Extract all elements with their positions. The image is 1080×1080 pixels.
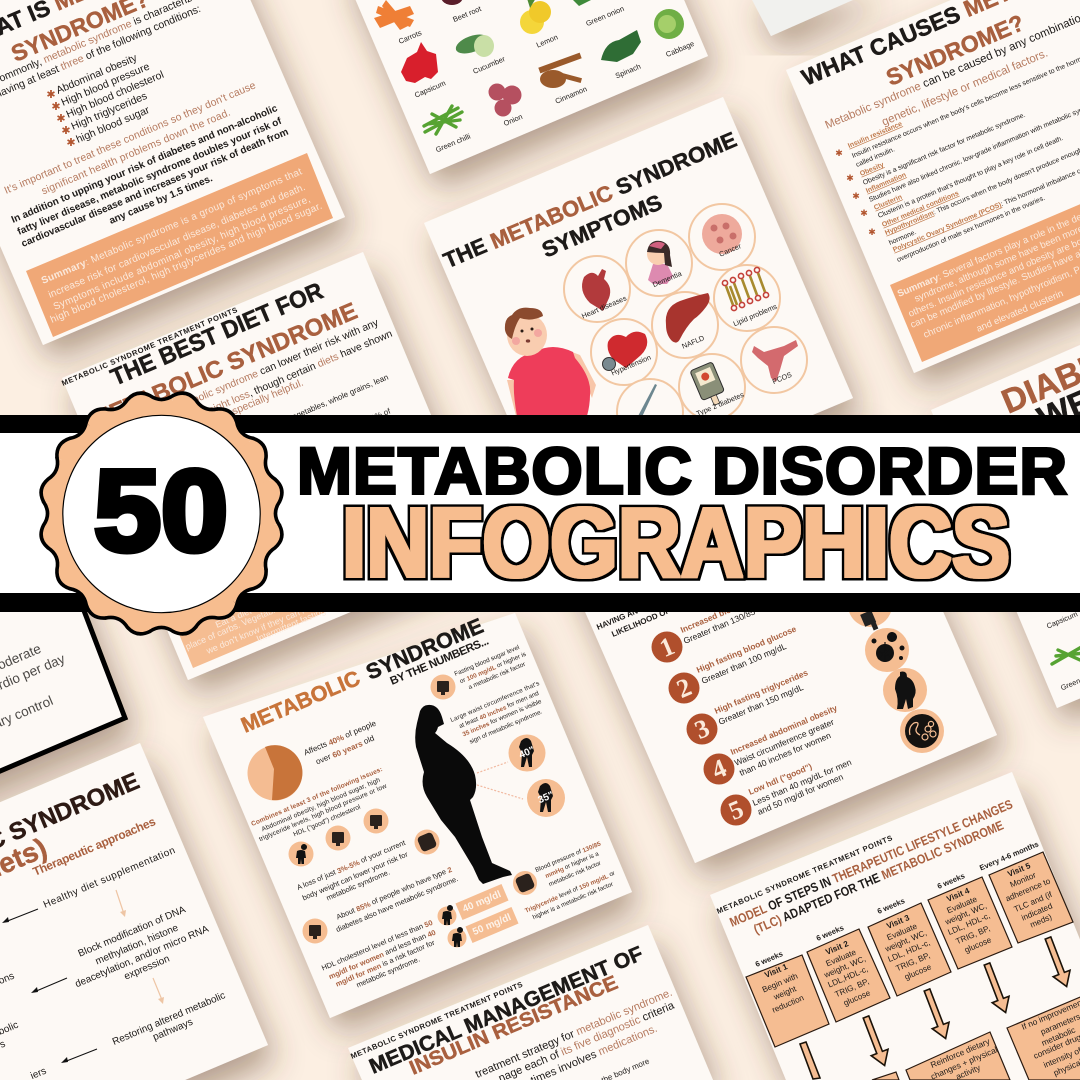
hdl value boxes	[455, 884, 519, 943]
condition bullet list: ✱	[56, 113, 66, 125]
panel: diabetes card top right	[931, 319, 1080, 575]
stat: right side texts: Blood pressure of 130/85	[534, 840, 602, 874]
panel: grey image card at top right	[748, 0, 880, 36]
left column fragments	[0, 971, 48, 1080]
label and chilli	[1045, 609, 1080, 692]
risk icons column	[848, 583, 944, 753]
summary text: Summary: Metabolic syndrome is a group of symptoms that	[40, 166, 304, 287]
symptom labels: Lipid problems	[732, 302, 779, 328]
panel: what causes metabolic syndrome	[786, 0, 1080, 373]
criteria values: Greater than 130/85	[682, 606, 757, 646]
arrows	[2, 890, 164, 1063]
numbers: 5	[724, 794, 748, 826]
intro text: Metabolic syndrome can lower their risk with any	[170, 317, 381, 415]
criteria values: Less than 40 mg/dL for men	[751, 757, 853, 808]
stat: right side texts: at least 40 inches for men and	[458, 690, 540, 730]
pie chart	[248, 745, 302, 800]
icon: hypertension heart	[602, 332, 647, 370]
banner bottom bar	[0, 593, 1080, 612]
stat: weight loss and diabetes: HDL cholesterol level of less than 50	[320, 917, 434, 973]
intro text: to be especially helpful.	[201, 378, 305, 430]
waist icons: 35"	[537, 790, 556, 806]
card background	[0, 743, 268, 1080]
heading: SYNDROME?	[882, 9, 1028, 91]
causes list	[835, 52, 1080, 264]
food labels: Green onion	[585, 4, 625, 28]
heading	[237, 613, 491, 738]
food labels: Green chilli	[434, 131, 472, 154]
stat: combines: HDL ("good") cholesterol	[292, 803, 362, 838]
symptom labels: Hypertension	[610, 353, 652, 377]
eyebrow: METABOLIC SYNDROME TREATMENT POINTS	[60, 305, 239, 388]
visit 4 text: weight, WC,	[943, 901, 988, 927]
causes list: hormone.	[888, 229, 918, 247]
criteria titles: Increased abdominal obesity	[729, 703, 839, 757]
icon: lipid bilayer	[722, 267, 769, 311]
food labels: Cinnamon	[554, 84, 588, 106]
visit 5 text	[1004, 861, 1054, 930]
card background	[348, 925, 713, 1080]
intro text: genetic, lifestyle or medical factors.	[880, 48, 1050, 128]
heading: THE METABOLIC SYNDROME	[440, 127, 740, 273]
visit 3 text	[883, 913, 933, 982]
bold risk text: In addition to upping your risk of diabetes and non-alcoholic	[10, 103, 280, 226]
white disc	[63, 415, 260, 613]
heading: (TLC) ADAPTED FOR THE METABOLIC SYNDROME	[751, 817, 1006, 937]
visit 5 text: Visit 5	[1006, 861, 1032, 879]
visit 1 text: Begin with	[761, 971, 800, 995]
criteria values: and 50 mg/dl for women	[756, 772, 845, 817]
summary box	[165, 560, 340, 668]
condition bullet list: high blood sugar	[74, 104, 152, 146]
card background	[62, 252, 489, 680]
condition bullet list: High triglycerides	[69, 90, 149, 133]
card background	[0, 430, 125, 803]
banner	[0, 415, 1080, 612]
diet notes: Eat lots of vegetables, whole grains, lean	[252, 373, 390, 438]
stat: combines: Abdominal obesity, high blood sugar, high	[261, 777, 382, 833]
causes list: ✱	[835, 148, 843, 158]
diet notes: Limit carbs to about 40-50% of	[288, 406, 392, 457]
visit 5 text: meds)	[1029, 912, 1053, 930]
card background	[424, 97, 853, 524]
label and chilli: Capsicum	[1045, 609, 1079, 631]
numbers: 2	[672, 672, 696, 704]
symptom labels: Heart diseases	[580, 293, 628, 321]
food labels: Cabbage	[664, 39, 696, 59]
card background	[786, 0, 1080, 373]
numbers	[655, 631, 748, 826]
steps: Restoring altered metabolic	[111, 990, 227, 1048]
criteria titles: Low hdl ("good")	[747, 761, 814, 797]
stat: right side texts	[449, 644, 616, 921]
visit 4 text: TRIG, BP,	[955, 924, 991, 946]
visit 2 text: Evaluate	[825, 947, 858, 968]
visit 2 text: LDL,HDL-c,	[827, 964, 869, 990]
stat: weight loss and diabetes: diabetes also have metabolic syndrome.	[335, 874, 459, 934]
steps: deacetylation, and/or micro RNA	[74, 924, 211, 990]
icon: syringe	[637, 384, 657, 419]
stat: right side texts: Fasting blood sugar level	[453, 644, 521, 678]
action text: Reinforce dietary	[929, 1036, 992, 1070]
food labels: Capsicum	[413, 78, 447, 100]
heading: INSULIN RESISTANCE	[406, 972, 621, 1080]
stat: weight loss and diabetes	[295, 838, 459, 989]
stat: right side texts: higher is a metabolic risk factor	[532, 881, 614, 921]
card background	[555, 415, 997, 863]
icon: cancer cells	[702, 214, 742, 254]
bold risk text: any cause by 1.5 times.	[108, 173, 215, 227]
icon: liver	[666, 293, 710, 343]
stat: right side texts: mmHg or higher is a	[544, 850, 600, 880]
panel: syndrome diets	[0, 743, 268, 1080]
visit 2 text: glucose	[842, 988, 872, 1008]
summary text: increase risk for cardiovascular disease, diabetes and death.	[47, 182, 307, 301]
condition bullet list: High blood pressure	[59, 61, 152, 109]
causes list: Inflammation	[865, 172, 907, 195]
visit 3 text: TRIG, BP,	[895, 951, 931, 973]
summary text: place of carbs. Vegetables and fruits are healthy	[184, 567, 365, 652]
action text: metabolic	[1040, 1025, 1077, 1048]
visit 2 text: Visit 2	[824, 939, 850, 957]
hdl value boxes: 50 mg/dl	[471, 912, 513, 938]
heading: SYMPTOMS	[538, 189, 666, 263]
treatment note: significant health problems down the road.	[40, 107, 232, 197]
criteria values: than 40 inches for women	[738, 730, 833, 778]
stat: 40 percent: Affects 40% of people	[302, 718, 378, 757]
icon circles left	[288, 674, 537, 948]
causes list: Obesity is a significant risk factor for metabolic syndrome.	[862, 112, 1027, 187]
visit 1 text	[761, 962, 806, 1015]
food labels: Carrots	[397, 28, 423, 46]
card background	[710, 772, 1080, 1080]
dotted connectors	[477, 762, 523, 799]
interval labels	[754, 839, 1040, 969]
steps: methylation, histone	[94, 922, 180, 967]
steps: Healthy diet supplementation	[42, 845, 177, 911]
title line one: METABOLIC DISORDER	[297, 434, 1067, 508]
stat: right side texts: 35 inches for women is visible	[461, 698, 543, 738]
stat: weight loss and diabetes: A loss of just 3%-5% of your current	[295, 838, 407, 892]
number badges	[652, 632, 752, 826]
causes list: overproduction of male sex hormones in the ovaries.	[896, 195, 1046, 264]
condition bullet list: ✱	[46, 89, 56, 101]
card background	[0, 0, 345, 345]
icon: heart	[582, 269, 610, 311]
symptom labels: Type 2 diabetes	[695, 390, 745, 418]
visit 5 text: TLC and (if	[1013, 890, 1054, 914]
heading: THE BEST DIET FOR	[107, 278, 327, 392]
visit 5 text: indicated	[1020, 901, 1054, 923]
summary text: Symptoms include abdominal obesity, high blood pressure,	[52, 194, 312, 313]
panel: best diet	[60, 252, 489, 680]
criteria titles: Increased blood pressure	[679, 586, 777, 635]
visit 3 text: LDL, HDL-c,	[887, 938, 931, 964]
panel: medical management	[348, 925, 713, 1080]
causes list: Clusterin is a protein that's thought to play a key role in cell death.	[877, 135, 1064, 220]
down arrows	[800, 935, 1075, 1079]
number 50: 50	[94, 448, 228, 576]
panel: symptoms	[424, 97, 853, 524]
criteria values: Greater than 100 mg/dL	[700, 641, 788, 686]
symptom labels: NAFLD	[680, 333, 706, 351]
heading: METABOLIC SYNDROME	[87, 298, 361, 434]
interval labels: 6 weeks	[936, 871, 966, 891]
visit 2 text: weight, WC,	[822, 954, 867, 980]
visit 3 text: weight, WC,	[883, 928, 928, 954]
eyebrow: METABOLIC SYNDROME TREATMENT POINTS	[349, 980, 524, 1061]
column title: Therapeutic approaches	[31, 814, 158, 879]
panel: foods grid	[342, 0, 708, 174]
intro: LIKELIHOOD OF METABOLIC SYNDROME	[610, 568, 762, 639]
panel: what is metabolic syndrome	[0, 0, 345, 345]
panel: right veg card under banner	[995, 500, 1080, 708]
criteria values	[682, 606, 853, 817]
waist icons	[508, 734, 565, 817]
visit 1 text: weight	[771, 984, 798, 1002]
causes list: ✱	[860, 208, 868, 218]
stat: weight loss and diabetes: mg/dl for men is a risk factor for	[334, 938, 437, 988]
stat: right side texts: Triglyceride level of 150 mg/dL or	[524, 870, 616, 914]
food labels: Spinach	[614, 62, 642, 80]
condition bullet list: Abdominal obesity	[54, 52, 140, 97]
bold risk text: cardiovascular disease and increases your risk of death from	[20, 127, 290, 250]
causes list: ✱	[868, 227, 876, 237]
card background	[342, 0, 708, 174]
causes list: called insulin.	[855, 146, 896, 169]
card background	[203, 613, 632, 1018]
stat: combines: triglyceride levels, high blood pressure or low	[258, 783, 388, 843]
heading: MODEL OF STEPS IN THERAPEUTIC LIFESTYLE CHANGES	[727, 796, 1015, 930]
criteria values: Waist circumference greater	[733, 717, 836, 768]
interval labels: 6 weeks	[754, 949, 784, 969]
interval labels: 6 weeks	[876, 896, 906, 916]
heading: METABOLIC	[237, 665, 364, 738]
intro: HAVING ANY 3 OF THESE INCREASES YOUR	[595, 556, 757, 632]
criteria values: Greater than 150 mg/dL	[717, 682, 805, 727]
lower action boxes	[872, 995, 1080, 1080]
causes list: ✱	[852, 191, 860, 201]
card background	[931, 345, 1080, 575]
action text	[929, 993, 1080, 1080]
food labels: Onion	[502, 112, 524, 128]
icon: dementia girl	[647, 241, 673, 284]
food labels	[397, 4, 696, 154]
intro text: weight loss, though certain diets have shown	[199, 329, 394, 420]
interval labels: 6 weeks	[815, 923, 845, 943]
stat: 40 percent: over 60 years old	[314, 734, 376, 766]
symptom labels: Dementia	[651, 269, 683, 289]
heading: BY THE NUMBERS...	[388, 635, 491, 688]
summary text: and elevated clusterin	[975, 288, 1065, 335]
heading: SYNDROME	[362, 613, 487, 685]
panel: black border exercise card	[0, 430, 125, 803]
visit 3 text: Evaluate	[886, 921, 919, 942]
condition bullet list: ✱	[66, 137, 76, 149]
hdl value boxes: 40 mg/dl	[461, 889, 503, 915]
criteria titles: High fasting blood glucose	[695, 624, 798, 675]
visit 3 text: Visit 3	[885, 913, 911, 931]
causes list: Clusterin	[873, 194, 903, 212]
summary box	[890, 183, 1080, 362]
visit 4 text: Evaluate	[946, 894, 979, 915]
numbers: 4	[707, 753, 731, 785]
bold risk text: fatty liver disease, metabolic syndrome doubles your risk of	[16, 116, 284, 238]
visit 5 text: adherence to	[1004, 876, 1052, 903]
steps: pathways	[151, 1017, 195, 1043]
stat: right side texts: a metabolic risk factor	[467, 661, 527, 691]
stat: weight loss and diabetes: About 85% of people who have type 2	[335, 865, 453, 921]
food icons	[374, 0, 684, 134]
criteria titles	[679, 586, 839, 797]
visit 2 text	[822, 939, 872, 1008]
numbers: 1	[655, 631, 679, 663]
causes list: ✱	[846, 173, 854, 183]
stat: weight loss and diabetes: mg/dl for women and less than 40	[327, 927, 437, 981]
interval labels: Every 4-6 months	[978, 839, 1040, 873]
badge: 50	[0, 351, 324, 676]
silhouette of man	[415, 705, 512, 884]
stat: weight loss and diabetes: body weight can lower your risk for	[301, 849, 410, 902]
banner white band	[0, 433, 1080, 593]
symptom labels: Cancer	[718, 241, 743, 259]
visit 4 text	[943, 886, 993, 955]
causes list: Insulin resistance	[847, 121, 904, 150]
criteria titles: High fasting triglycerides	[713, 667, 810, 716]
steps	[42, 845, 227, 1048]
symptom labels: PCOS	[771, 370, 793, 386]
stat: right side texts: or 100 mg/dL or higher is	[459, 651, 527, 685]
stat: right side texts: sign of metabolic syndrome.	[469, 708, 544, 746]
visit boxes	[746, 852, 1073, 1047]
intro text: treatment strategy for metabolic syndrome.	[474, 987, 674, 1080]
visit 4 text: glucose	[963, 935, 993, 955]
stat: right side texts: Large waist circumference that's	[449, 680, 541, 724]
boy illustration	[505, 308, 596, 416]
stat: weight loss and diabetes: metabolic syndrome.	[355, 955, 421, 989]
treatment note: It's important to treat these conditions so they don't cause	[2, 79, 258, 197]
symptom labels	[580, 241, 793, 418]
card background	[995, 500, 1080, 708]
causes list: Obesity	[859, 161, 885, 178]
food labels: Beet root	[451, 4, 483, 24]
scalloped seal	[0, 351, 324, 676]
visit 2 text: TRIG, BP,	[834, 977, 870, 999]
stat: right side texts: metabolic risk factor	[548, 860, 602, 888]
card text	[0, 641, 67, 741]
summary text: Eat a diet with more protein	[214, 578, 319, 630]
causes list: Other medical conditions	[881, 190, 960, 229]
icon: uterus	[752, 340, 798, 382]
food labels: Cucumber	[472, 54, 507, 76]
banner top bar	[0, 415, 1080, 433]
steps: expression	[123, 953, 171, 983]
summary box	[26, 153, 333, 337]
summary text: Intermittent fasting	[255, 606, 327, 644]
panel: metabolic syndrome by the numbers	[203, 613, 632, 1018]
visit 1 text: reduction	[771, 993, 806, 1015]
condition bullet list	[46, 52, 166, 149]
eyebrow: METABOLIC SYNDROME TREATMENT POINTS	[715, 833, 894, 916]
numbers: 3	[690, 713, 714, 745]
visit 3 text: glucose	[903, 962, 933, 982]
stat: combines: Combines at least 3 of the following issues:	[250, 766, 384, 828]
visit 1 text: Visit 1	[763, 962, 789, 980]
condition bullet list: High blood cholesterol	[64, 69, 166, 121]
condition bullet list: ✱	[61, 125, 71, 137]
heading: MEDICAL MANAGEMENT OF	[366, 942, 647, 1079]
symptom circles	[564, 204, 807, 445]
summary text: high blood cholesterol, high triglycerides and high blood sugar.	[49, 201, 324, 326]
waist icons: 40"	[518, 745, 537, 761]
steps: Block modification of DNA	[77, 904, 188, 960]
panel: five criteria list	[555, 415, 997, 863]
icon: glucose meter	[690, 362, 728, 409]
visit 5 text: Monitor	[1009, 870, 1038, 889]
panel: model of steps	[710, 772, 1080, 1080]
stat: weight loss and diabetes: metabolic syndrome.	[325, 868, 391, 902]
visit 4 text: LDL, HDL-c,	[947, 911, 991, 937]
visit 4 text: Visit 4	[945, 886, 971, 904]
food labels: Lemon	[535, 32, 559, 50]
condition bullet list: ✱	[51, 101, 61, 113]
summary text: we don't know if they can reverse it.	[204, 591, 340, 656]
